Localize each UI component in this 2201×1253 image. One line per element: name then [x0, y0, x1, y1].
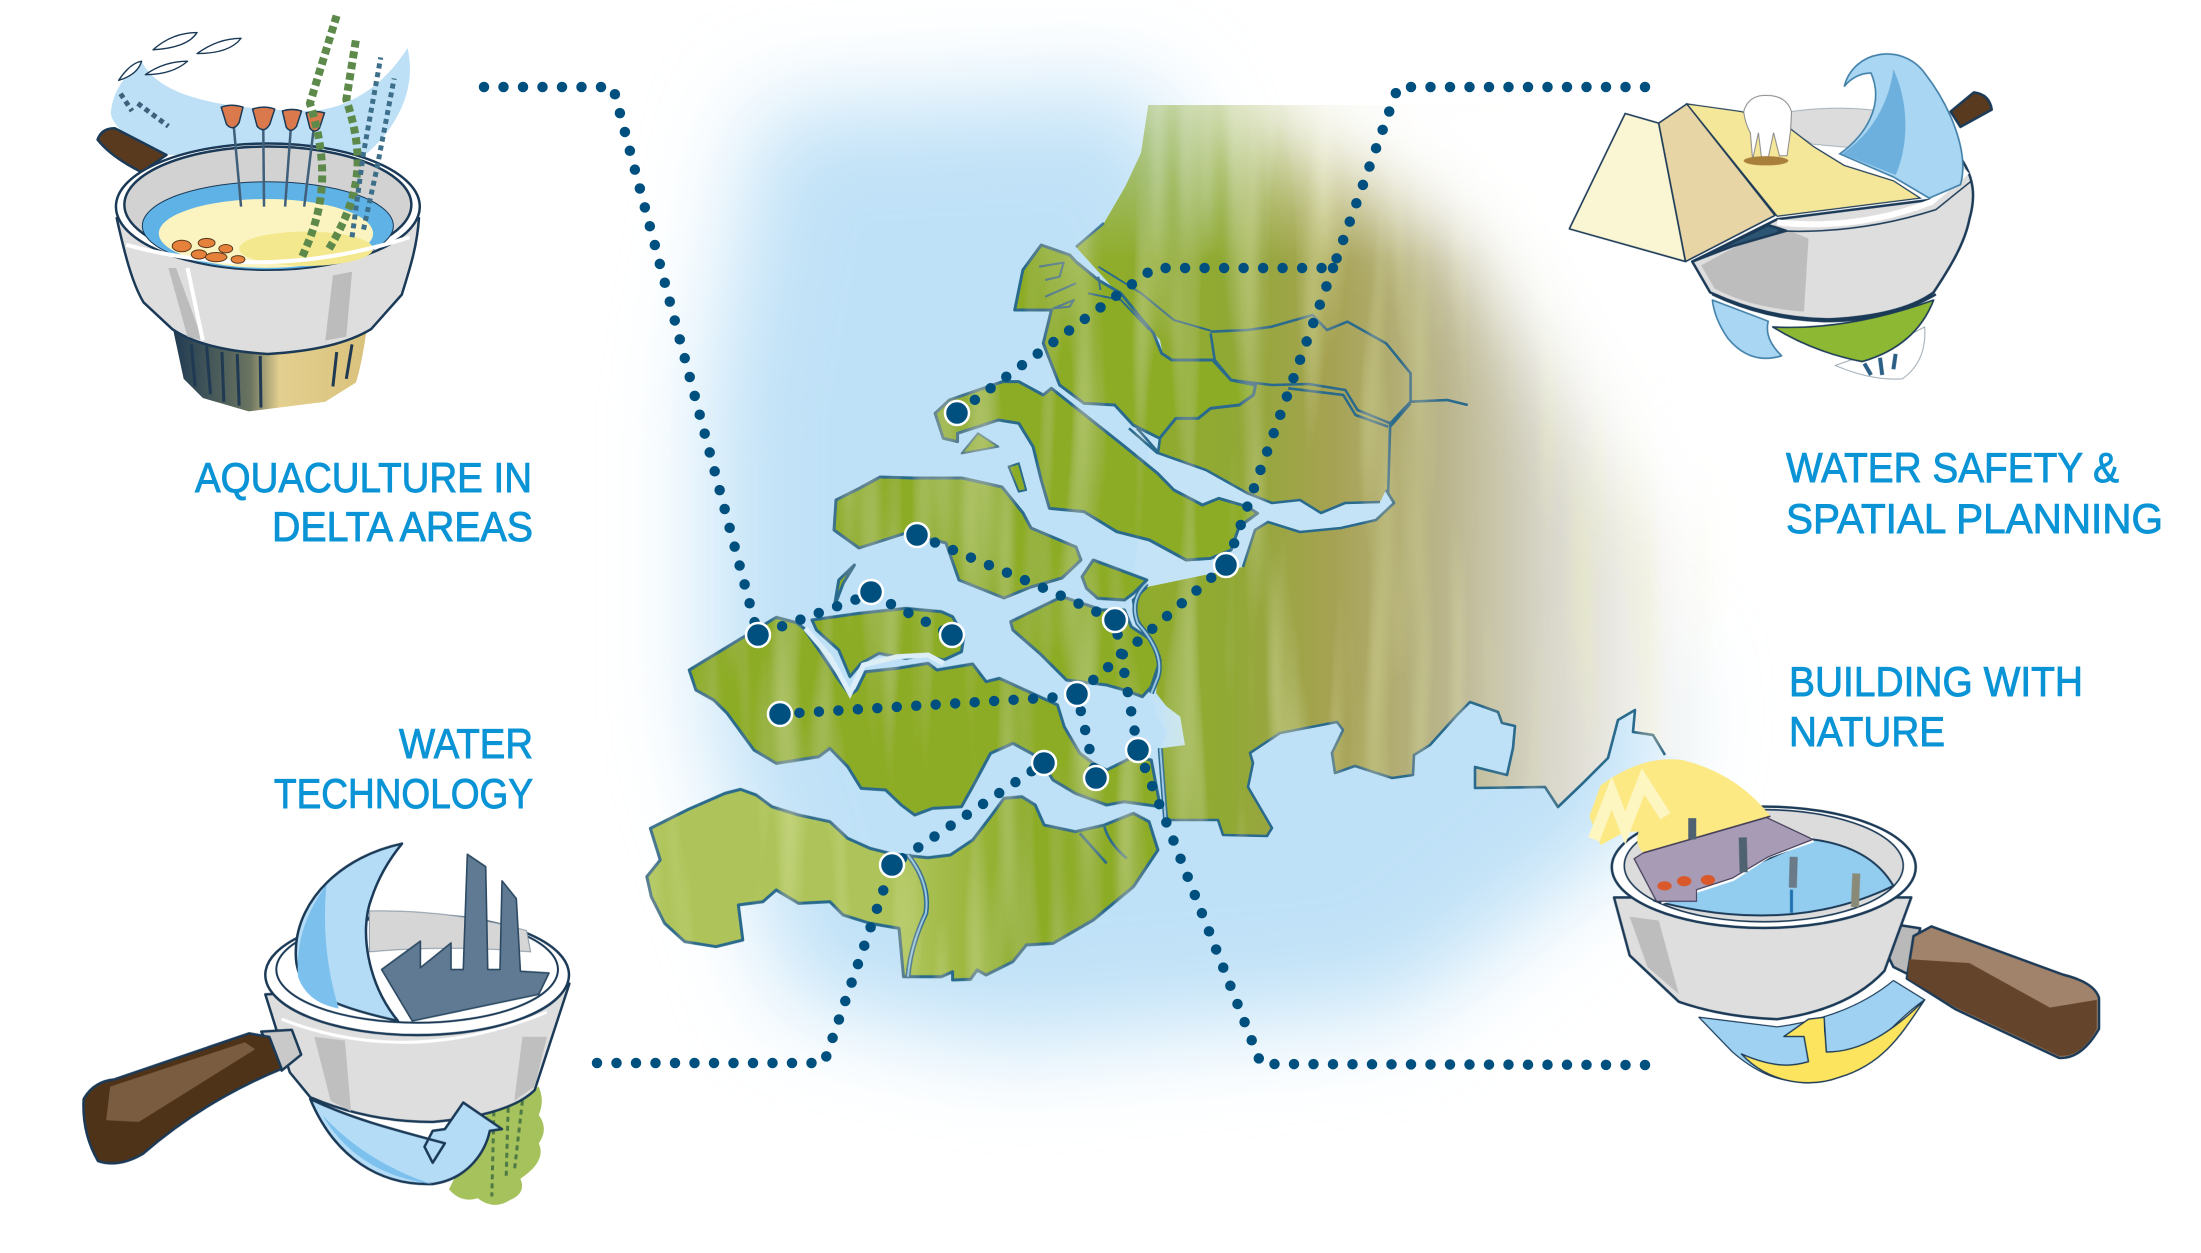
oyster stakes: [221, 105, 324, 207]
pot underside: [172, 325, 367, 411]
pot body: [117, 218, 419, 354]
wave: [1840, 54, 1963, 198]
lower current: [1699, 981, 1925, 1082]
handle: [1882, 924, 1920, 975]
heading: building with nature: BUILDING WITH: [1789, 658, 2083, 705]
handle: [98, 128, 166, 172]
heading: water safety and spatial planning: WATER SAFETY &: [1786, 444, 2119, 491]
water: [1656, 839, 1893, 915]
heading: water technology: TECHNOLOGY: [274, 770, 533, 817]
water swirl: [111, 48, 410, 155]
heading: aquaculture in delta areas: AQUACULTURE IN: [195, 454, 532, 501]
heading: water technology: [274, 720, 533, 817]
lower delta islands: [647, 560, 1185, 980]
green land: [1835, 327, 1925, 379]
dotted connector lines: [484, 87, 1645, 1065]
mainland: [1075, 105, 1707, 838]
pot back wall: [1791, 108, 1893, 148]
location pins: [746, 401, 1238, 877]
pan: water safety: [1569, 54, 1992, 379]
dune: [1589, 759, 1770, 853]
handle: [1951, 92, 1992, 127]
upper delta islands: [935, 245, 1468, 560]
water strip behind the mainland: [1130, 440, 1405, 610]
sheep: [1744, 95, 1791, 160]
pot body: [1692, 158, 1973, 319]
pot rim: [265, 915, 569, 1035]
pot rim: [116, 143, 420, 270]
heading: water safety and spatial planning: [1786, 444, 2163, 542]
heading: aquaculture in delta areas: [195, 454, 533, 550]
crabs: [1657, 875, 1715, 890]
heading: water technology: WATER: [399, 720, 533, 767]
pan: aquaculture: [98, 15, 420, 411]
map of the delta: [484, 87, 1800, 1065]
pot body: [1614, 897, 1911, 1019]
pan: building with nature: [1589, 759, 2099, 1083]
fish: [119, 33, 241, 80]
islands: [647, 245, 1468, 980]
algae bush: [449, 1087, 544, 1205]
circular arrow top: [296, 844, 402, 1021]
handle: [261, 1030, 301, 1071]
factory: [382, 854, 549, 1021]
heading: water safety and spatial planning: SPATIAL PLANNING: [1786, 495, 2163, 542]
water background glow: [710, 90, 1670, 1045]
heading: building with nature: NATURE: [1789, 708, 1945, 755]
heading: aquaculture in delta areas: DELTA AREAS: [272, 503, 533, 550]
heading: building with nature: [1789, 658, 2083, 755]
pan: water technology: [83, 844, 569, 1205]
pot body: [265, 984, 569, 1122]
circular arrow bottom: [310, 1099, 502, 1184]
pot rim: [1612, 807, 1916, 928]
sea plants: [302, 15, 394, 256]
tidal flats: [1634, 816, 1813, 901]
dike: [1569, 113, 1686, 262]
lower wave: [1712, 300, 1782, 358]
oysters: [172, 238, 245, 263]
poles: [1692, 818, 1856, 907]
island: Schouwen-Duiveland: [834, 477, 1081, 598]
